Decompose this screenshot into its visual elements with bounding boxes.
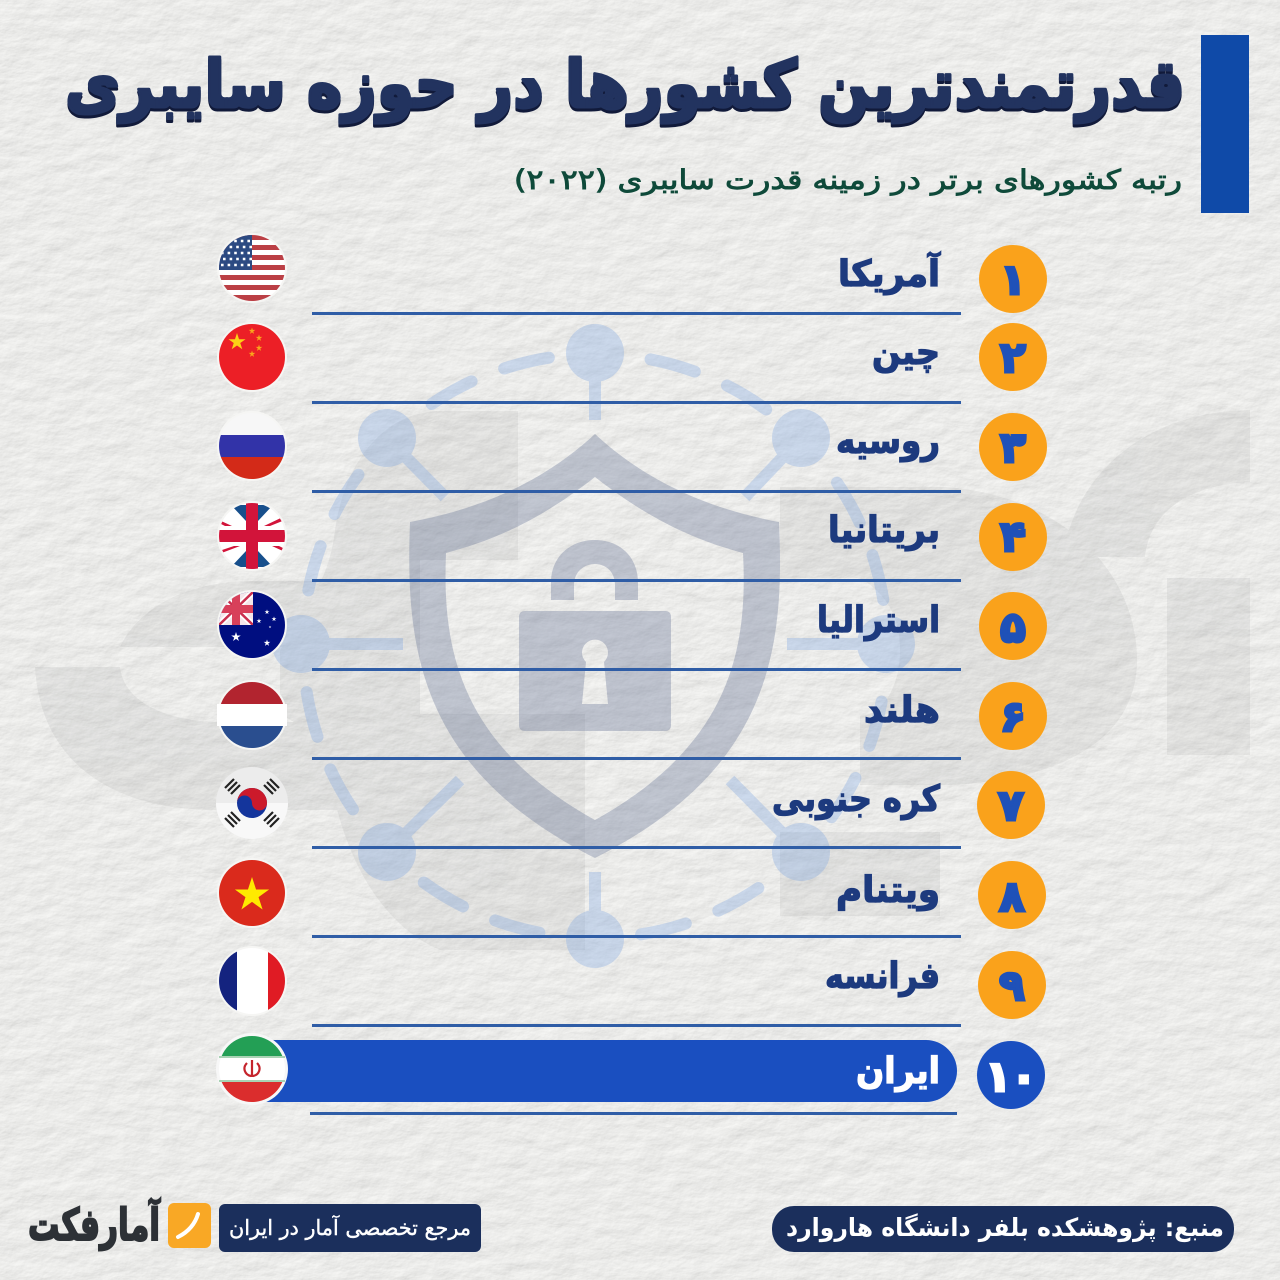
- row divider lines: [310, 312, 961, 1115]
- badge 5: ۵: [1000, 603, 1026, 652]
- badge 6: [979, 682, 1047, 750]
- source pill: [772, 1206, 1234, 1252]
- badge 7: [977, 771, 1045, 839]
- shield and lock: [409, 434, 780, 858]
- badge 3: [979, 413, 1047, 481]
- label: USA: آمریکا: [838, 251, 942, 295]
- flag: Australia: [217, 590, 287, 660]
- padlock shackle: [551, 540, 638, 600]
- label: Iran: ایران: [856, 1051, 940, 1092]
- flag: Netherlands: [216, 680, 288, 750]
- title: قدرتمندترین کشورها در حوزه سایبری: [65, 49, 1185, 127]
- badge 8: ۸: [999, 872, 1025, 921]
- title accent bar: [1201, 35, 1249, 213]
- network nodes: [272, 324, 915, 968]
- label: Netherlands: هلند: [864, 690, 940, 731]
- badge 10: ۱۰: [985, 1052, 1037, 1101]
- flag: China: [217, 322, 287, 392]
- badge 3: ۳: [1000, 423, 1026, 472]
- tagline box: مرجع تخصصی آمار در ایران: [229, 1215, 471, 1240]
- highlight bar: Iran: [252, 1040, 957, 1102]
- shield outline: [409, 434, 780, 858]
- network ring: [272, 324, 915, 968]
- tagline box: [219, 1204, 481, 1252]
- badge 5: [979, 592, 1047, 660]
- dashed orbit: [303, 354, 887, 938]
- badge 2: ۲: [1000, 333, 1026, 382]
- badge 9: [978, 951, 1046, 1019]
- flag: South Korea: [216, 767, 288, 839]
- badge 1: [979, 245, 1047, 313]
- flag: Russia: [217, 411, 287, 481]
- badge 4: [979, 503, 1047, 571]
- label: South Korea: کره جنوبی: [772, 779, 940, 820]
- flag: USA: [217, 233, 287, 303]
- badge 4: ۴: [1000, 512, 1026, 561]
- network spokes: [301, 353, 886, 939]
- faint logo watermark: [35, 410, 1250, 950]
- label: Vietnam: ویتنام: [836, 870, 940, 911]
- label: France: فرانسه: [825, 956, 940, 997]
- flag: Iran: [216, 1033, 288, 1105]
- label: China: چین: [872, 332, 940, 373]
- badge 6: ۶: [1000, 692, 1026, 741]
- label: UK: بریتانیا: [828, 510, 940, 551]
- badge 2: [979, 323, 1047, 391]
- flag: France: [217, 946, 287, 1016]
- badge 8: [978, 861, 1046, 929]
- label: Australia: استرالیا: [817, 600, 940, 641]
- flag: UK: [217, 501, 287, 571]
- logo wordmark: آمارفکت: [28, 1197, 161, 1251]
- padlock: [519, 611, 671, 731]
- badge 9: ۹: [999, 961, 1025, 1010]
- flag: Vietnam: [217, 858, 287, 928]
- subtitle: رتبه کشورهای برتر در زمینه قدرت سایبری (۲۰۲۲): [514, 165, 1182, 196]
- rank badges: [977, 245, 1047, 1109]
- source pill: منبع: پژوهشکده بلفر دانشگاه هاروارد: [786, 1213, 1224, 1243]
- badge 10: [977, 1041, 1045, 1109]
- badge 7: ۷: [998, 781, 1024, 830]
- title: قدرتمندترین کشورها در حوزه سایبری: [65, 46, 1185, 124]
- country names: [772, 251, 942, 1092]
- badge 1: ۱: [1000, 255, 1026, 304]
- label: Russia: روسیه: [836, 421, 940, 462]
- logo icon: [168, 1203, 211, 1248]
